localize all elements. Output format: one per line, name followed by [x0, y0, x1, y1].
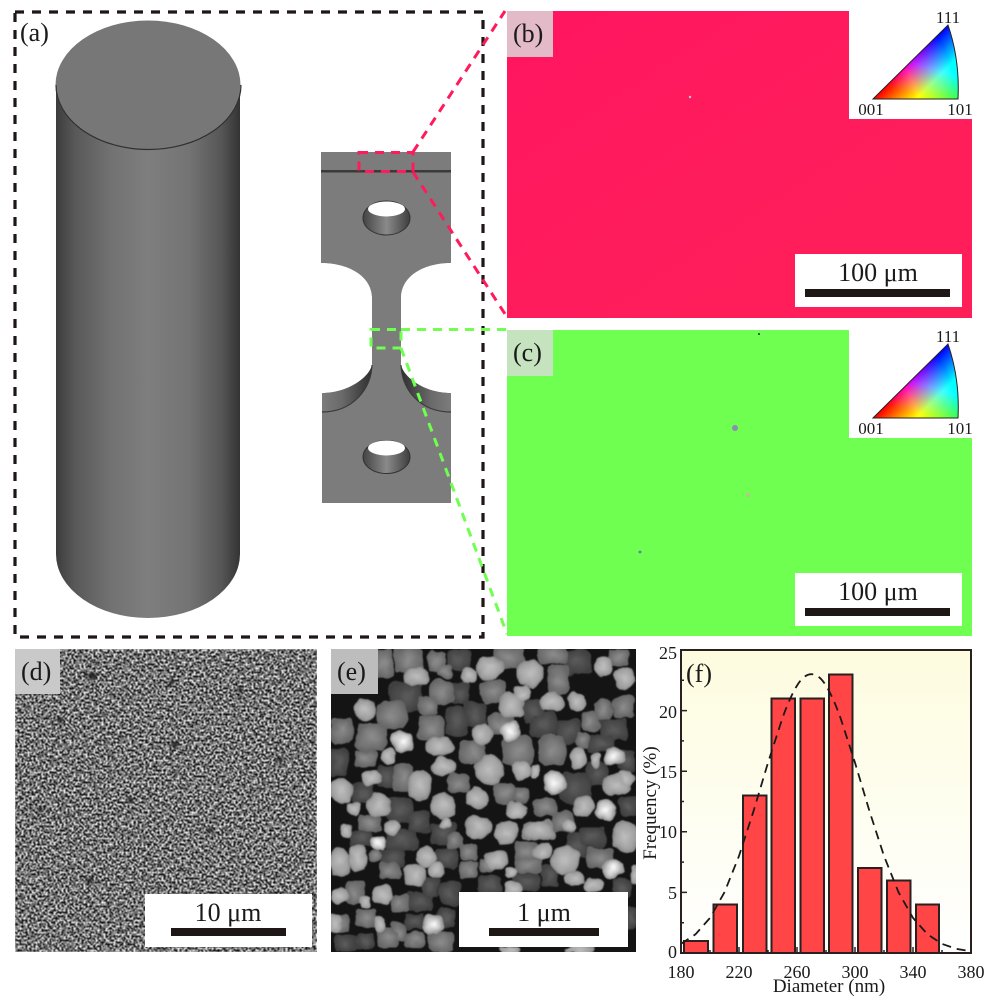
y axis tick labels: 0 [668, 942, 677, 962]
panel b: red orientation map [507, 8, 973, 318]
y axis title: Frequency (%) [640, 746, 661, 860]
green zoom guide lines [371, 330, 507, 634]
panel b IPF legend [849, 8, 973, 119]
panel b label: (b) [513, 19, 543, 48]
panel c IPF legend [849, 327, 973, 438]
x axis tick labels [668, 962, 984, 982]
panel b IPF legend: 001 [858, 100, 884, 119]
x axis title: Diameter (nm) [773, 976, 885, 997]
histogram bars [684, 674, 939, 953]
panel c IPF legend: 111 [936, 327, 960, 346]
dog-bone tensile specimen [321, 152, 451, 503]
panel c scale bar [795, 573, 962, 626]
y axis tick labels [659, 643, 677, 962]
panel e scale bar [459, 892, 628, 947]
panel d label [15, 649, 60, 694]
panel a label: (a) [20, 18, 49, 47]
x axis tick labels: 380 [958, 962, 984, 982]
x axis tick labels: 220 [726, 962, 752, 982]
dark voids in micrograph [37, 672, 283, 883]
panel b IPF legend: 111 [936, 8, 960, 27]
y axis tick labels: 15 [659, 762, 677, 782]
panel d scale bar: 10 μm [195, 898, 261, 927]
panel a: specimen models [15, 12, 483, 637]
x axis tick labels: 340 [900, 962, 926, 982]
panel a frame [15, 12, 483, 637]
panel e label [331, 649, 378, 694]
precipitate particles [328, 647, 638, 953]
x axis tick labels: 180 [668, 962, 694, 982]
panel c label [507, 330, 553, 376]
panel e label: (e) [337, 657, 366, 686]
panel b IPF legend: 101 [947, 100, 973, 119]
y axis tick labels: 10 [659, 822, 677, 842]
panel d: low-magnification micrograph [15, 649, 317, 952]
panel c: green orientation map [507, 327, 973, 636]
y axis tick labels: 5 [668, 883, 677, 903]
fitted distribution curve [681, 674, 971, 951]
panel d label: (d) [21, 657, 51, 686]
panel c IPF legend: 001 [858, 419, 884, 438]
cylinder model [56, 20, 241, 618]
panel c IPF legend: 101 [947, 419, 973, 438]
lower hole [363, 440, 410, 474]
panel c label: (c) [513, 338, 542, 367]
scattered grain specks [639, 333, 760, 553]
y axis tick labels: 25 [659, 643, 677, 663]
upper hole [363, 201, 410, 235]
y axis tick labels: 20 [659, 702, 677, 722]
panel f label: (f) [686, 659, 712, 688]
plot background [681, 650, 971, 953]
plot frame and ticks [681, 650, 971, 953]
panel b label [507, 11, 553, 57]
x axis tick labels: 300 [842, 962, 868, 982]
panel b scale bar [795, 254, 962, 307]
x axis tick labels: 260 [784, 962, 810, 982]
red zoom guide lines [359, 11, 507, 317]
panel d scale bar [145, 894, 312, 947]
panel f: diameter histogram [640, 643, 984, 997]
panel e scale bar: 1 μm [517, 898, 571, 927]
panel b scale bar: 100 μm [838, 258, 918, 287]
panel c scale bar: 100 μm [838, 577, 918, 606]
panel e: high-magnification micrograph [328, 647, 638, 953]
